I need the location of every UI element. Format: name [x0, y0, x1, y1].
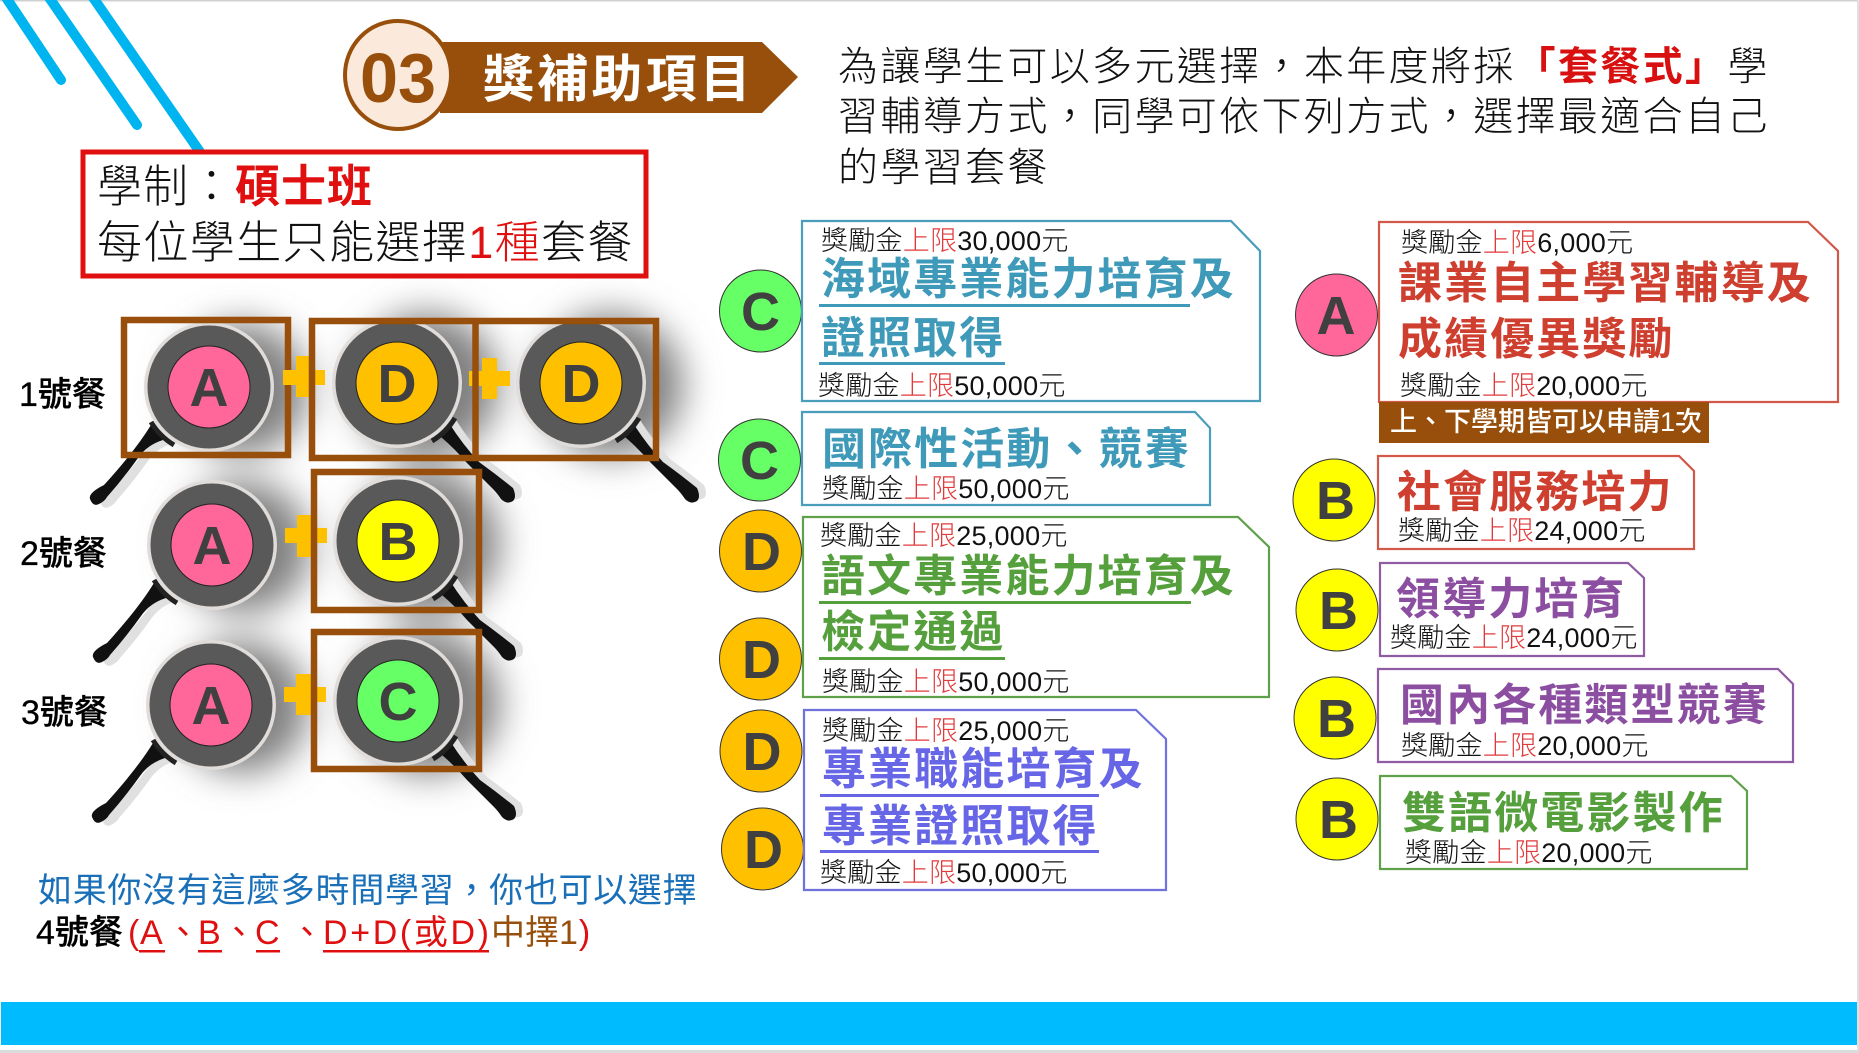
number: 03: [360, 39, 436, 117]
panel: self-directed study: 獎勵金上限6,000元: [1401, 228, 1633, 258]
note strip: 上、下學期皆可以申請1次: [1390, 407, 1702, 437]
badge: D: [722, 808, 804, 890]
panel: bilingual micro-film: 雙語微電影製作: [1402, 789, 1725, 838]
panel: leadership: 領導力培育: [1396, 575, 1626, 624]
pan: meal 1 second D: D: [562, 354, 600, 414]
badge: C: [718, 419, 800, 501]
alternative note: blue line: 如果你沒有這麼多時間學習，你也可以選擇: [38, 872, 697, 910]
program rule box: 每位學生只能選擇1種套餐: [97, 217, 634, 268]
meal 2 label: 2號餐: [20, 535, 107, 573]
panel: overseas professional training: 證照取得: [821, 314, 1005, 363]
badge: D: D: [742, 722, 782, 782]
program rule box: 學制：碩士班: [97, 161, 373, 212]
intro paragraph: 習輔導方式，同學可依下列方式，選擇最適合自己: [838, 95, 1770, 139]
badge: C: C: [741, 282, 780, 342]
note strip: [1379, 402, 1709, 443]
pan: meal 2 B: B: [378, 512, 418, 572]
panel: self-directed study: 成績優異獎勵: [1398, 315, 1675, 364]
panel: domestic competitions: 國內各種類型競賽: [1400, 681, 1769, 730]
heading text: 獎補助項目: [483, 51, 754, 108]
panel: community service: 獎勵金上限24,000元: [1398, 516, 1646, 546]
pan: meal 2 A: [93, 480, 277, 666]
panel: language proficiency: 語文專業能力培育及: [821, 552, 1236, 601]
intro paragraph: 的學習套餐: [838, 146, 1050, 190]
intro paragraph: 為讓學生可以多元選擇，本年度將採「套餐式」學: [838, 45, 1770, 89]
badge: B: [1296, 569, 1378, 651]
badge: D: D: [742, 522, 781, 582]
pan: meal 3 C: C: [378, 672, 418, 732]
alternative note: meal 4 line: 、: [222, 914, 256, 952]
alternative note: meal 4 line: D+D(或D): [323, 914, 489, 952]
meal 1 label: 1號餐: [19, 376, 106, 414]
alternative note: meal 4 line: B: [198, 914, 221, 952]
alternative note: meal 4 line: 、: [166, 914, 200, 952]
pan: meal 2 B: [333, 476, 523, 661]
panel: professional certification: 獎勵金上限50,000元: [820, 858, 1068, 888]
decorative blue diagonal lines: [5, 0, 200, 152]
panel: international activities: [802, 412, 1210, 505]
panel: international activities: 獎勵金上限50,000元: [822, 474, 1070, 504]
pan shadows: [176, 313, 683, 775]
pan: meal 3 A: [92, 640, 276, 826]
alternative note: meal 4 line: 4號餐: [36, 914, 123, 952]
panel: domestic competitions: [1378, 669, 1793, 762]
highlight frames around other pans: [312, 321, 656, 769]
badge: A: A: [1316, 286, 1356, 346]
badge: B: [1293, 459, 1375, 541]
panel: language proficiency: 獎勵金上限25,000元: [820, 521, 1068, 551]
meal 3 label: 3號餐: [21, 694, 108, 732]
plus signs: [283, 356, 510, 715]
panel: leadership: 獎勵金上限24,000元: [1390, 623, 1638, 653]
panel: professional certification: 獎勵金上限25,000元: [822, 716, 1070, 746]
panel: leadership: [1380, 563, 1644, 656]
badge: B: [1296, 778, 1378, 860]
badge: B: B: [1319, 581, 1358, 641]
badge: B: [1294, 677, 1376, 759]
panel: bilingual micro-film: 獎勵金上限20,000元: [1405, 838, 1653, 868]
panel: overseas professional training: 海域專業能力培育及: [821, 255, 1236, 304]
panel: overseas professional training: 獎勵金上限30,000元: [821, 226, 1069, 256]
pan: meal 1 A: [90, 322, 274, 508]
pan: meal 1 A: A: [190, 358, 228, 418]
badge: D: [720, 618, 802, 700]
panel: self-directed study: [1379, 222, 1838, 402]
badge: D: [720, 710, 802, 792]
banner arrow: [440, 42, 798, 113]
panel: professional certification: 專業職能培育及: [822, 745, 1145, 794]
panel: domestic competitions: 獎勵金上限20,000元: [1401, 731, 1649, 761]
program rule box: [83, 152, 646, 276]
alternative note: meal 4 line: C: [255, 914, 280, 952]
pan: meal 3 A: A: [192, 676, 230, 736]
panel: language proficiency: 獎勵金上限50,000元: [822, 667, 1070, 697]
panel: overseas professional training: 獎勵金上限50,000元: [818, 371, 1066, 401]
badge: B: B: [1317, 689, 1356, 749]
panel: professional certification: [804, 710, 1166, 890]
panel: international activities: 國際性活動、競賽: [822, 425, 1191, 474]
badge: B: B: [1316, 471, 1355, 531]
panel: community service: [1378, 456, 1694, 549]
badge: B: B: [1319, 790, 1358, 850]
pan: meal 3 C: [333, 636, 523, 821]
badge: C: C: [740, 431, 779, 491]
panel: overseas professional training: [802, 221, 1260, 401]
panel: self-directed study: 獎勵金上限20,000元: [1400, 371, 1648, 401]
bottom blue bar: [1, 1002, 1857, 1045]
pan: meal 1 D: D: [378, 354, 416, 414]
highlight frame: meal 1 A: [124, 320, 288, 455]
alternative note: meal 4 line: 、: [290, 914, 324, 952]
badge: D: D: [742, 630, 781, 690]
panel: language proficiency: 檢定通過: [821, 608, 1005, 657]
intro paragraph: [838, 45, 1770, 190]
alternative note: meal 4 line: A: [140, 914, 163, 952]
alternative note: meal 4 line: 中擇1): [491, 914, 590, 952]
section heading banner: [345, 21, 798, 129]
number circle: [345, 21, 451, 129]
pan: meal 1 D: [332, 318, 522, 503]
badge: C: [720, 270, 802, 352]
panel: self-directed study: 課業自主學習輔導及: [1398, 259, 1813, 308]
pan: meal 1 second D: [516, 318, 706, 503]
alternative note: meal 4 line: (: [128, 914, 140, 952]
badge: A: [1296, 274, 1378, 356]
alternative note: meal 4 line: [36, 914, 590, 952]
badge: D: [720, 510, 802, 592]
panel: language proficiency: [803, 517, 1269, 697]
badge: D: D: [744, 820, 783, 880]
panel: professional certification: 專業證照取得: [822, 802, 1099, 851]
panel: bilingual micro-film: [1380, 776, 1747, 869]
pan: meal 2 A: A: [192, 516, 232, 576]
panel: community service: 社會服務培力: [1397, 468, 1674, 517]
